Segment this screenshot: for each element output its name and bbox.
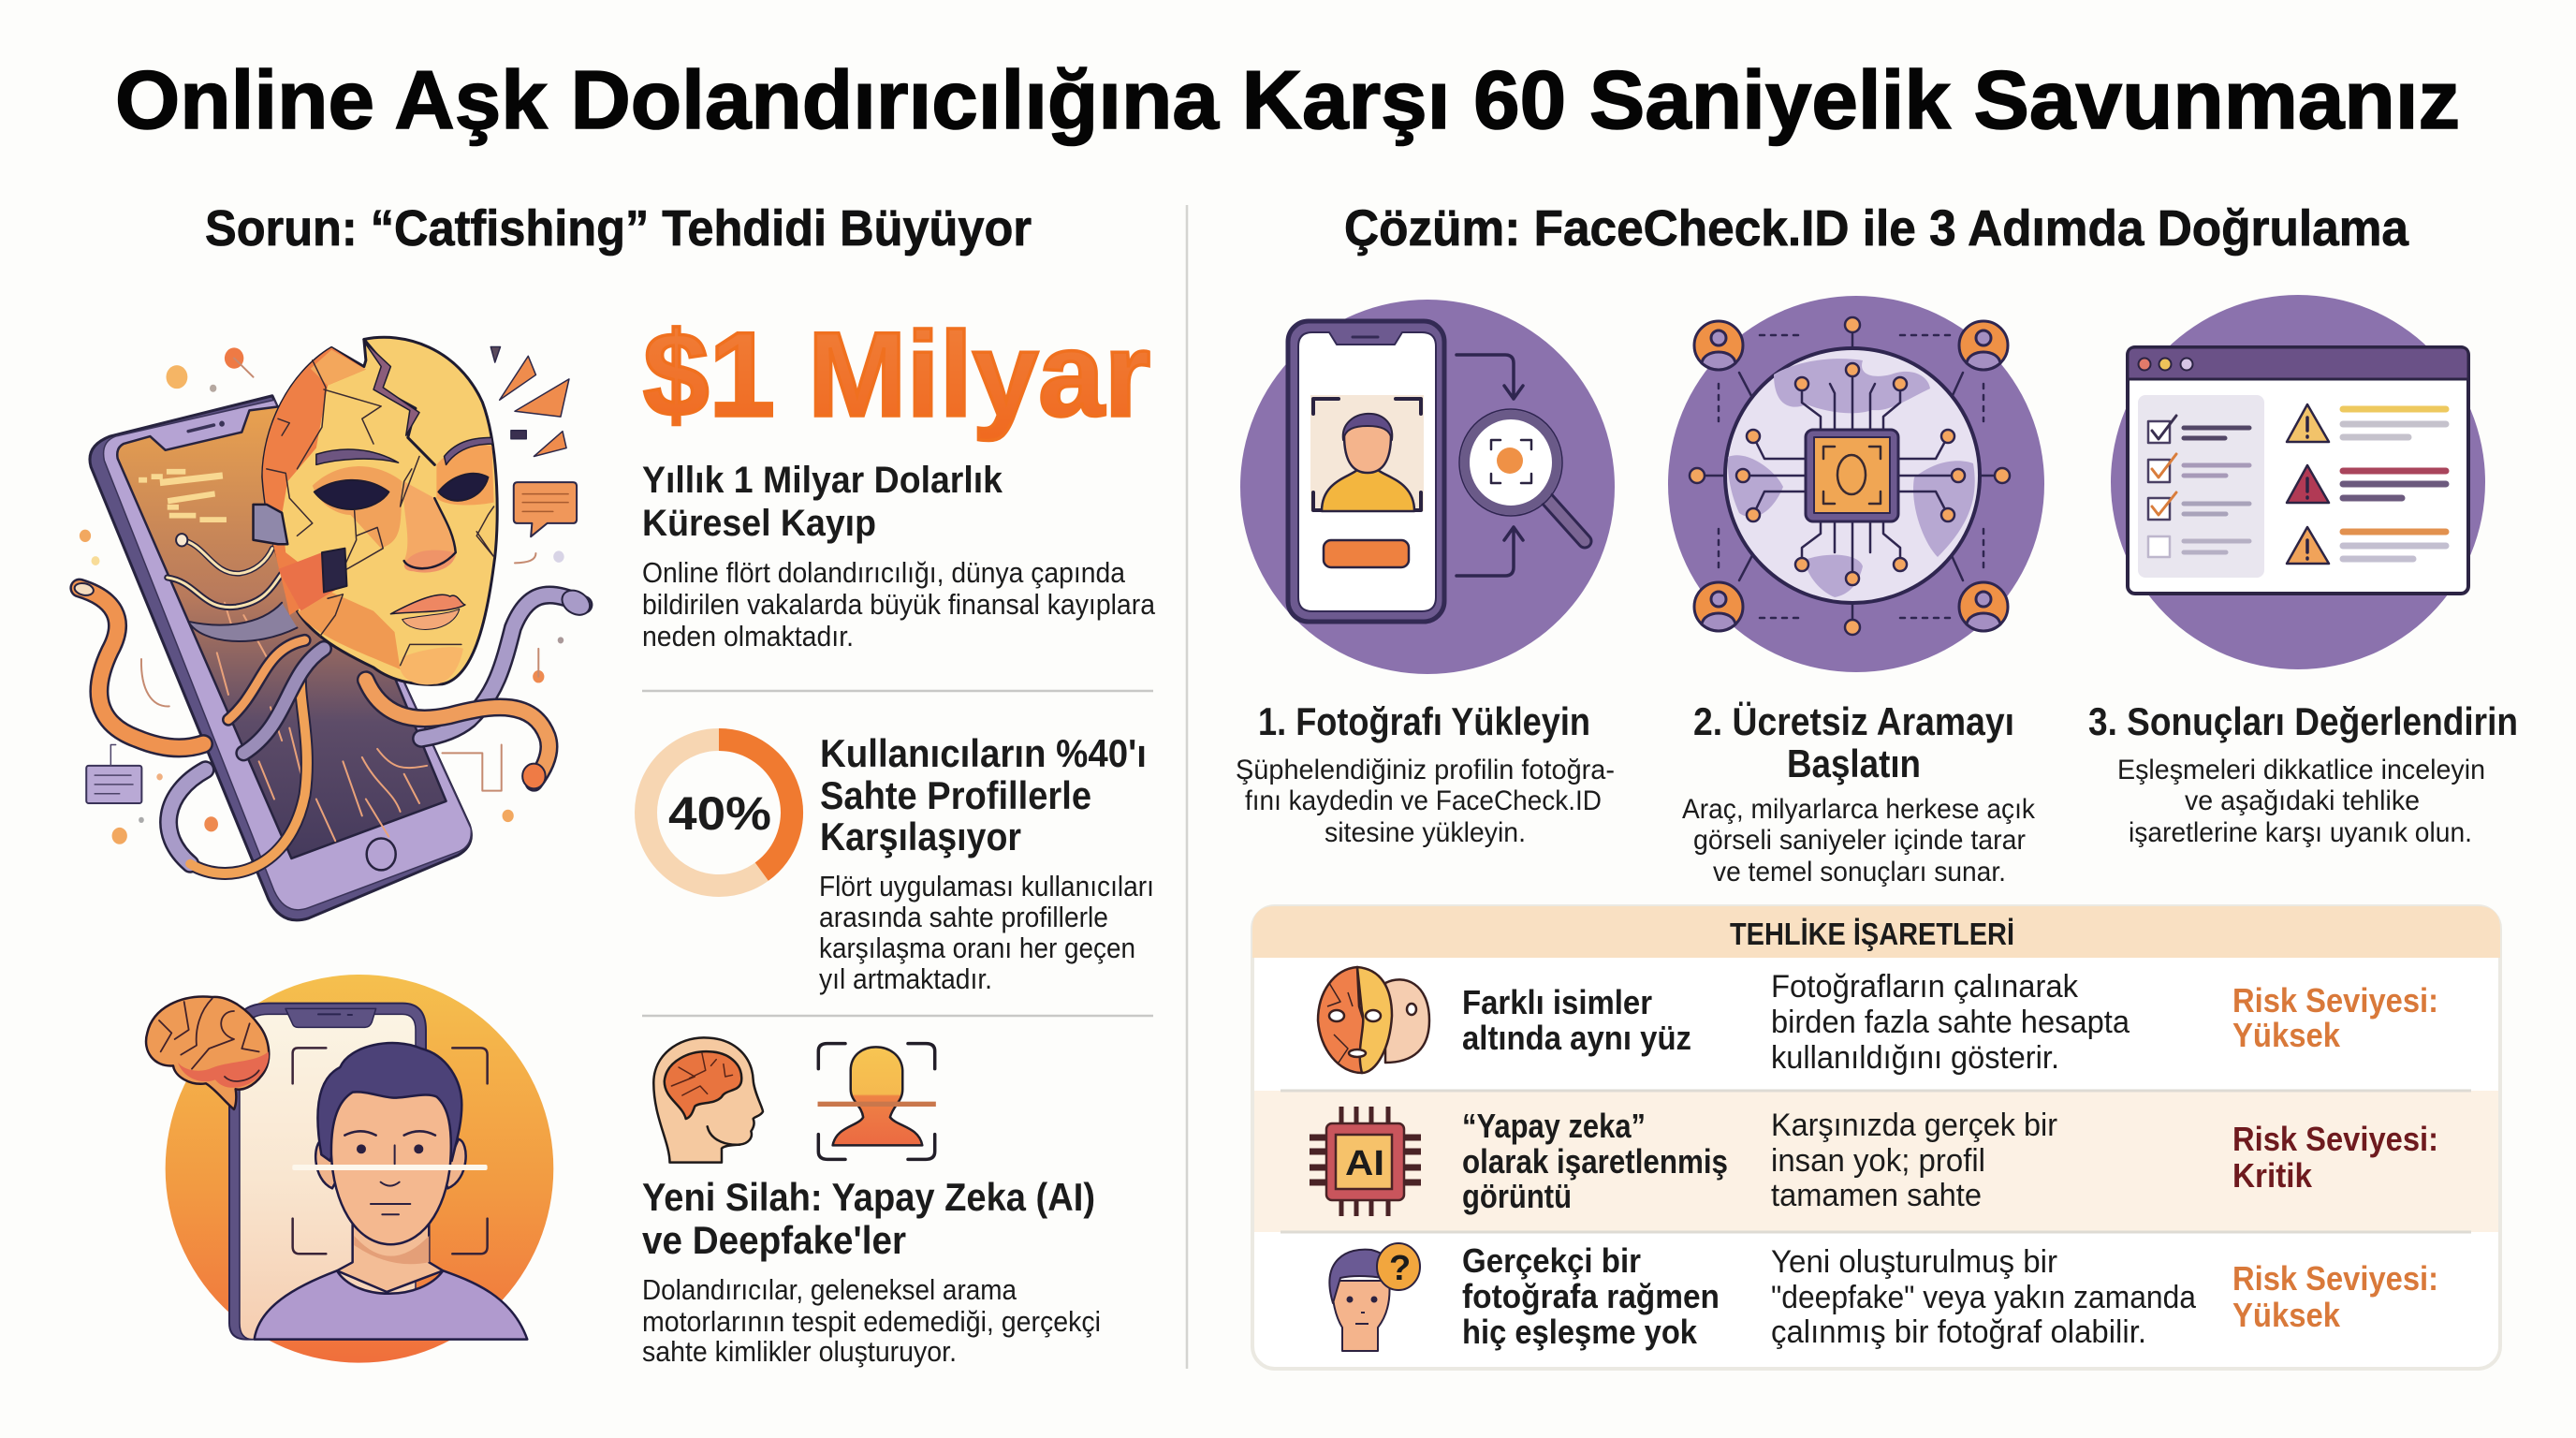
icon label: AI (1345, 1144, 1384, 1183)
risk level: high: Yüksek (2232, 1016, 2341, 1054)
title: Online Aşk Dolandırıcılığına Karşı 60 Saniyelik Savunmanız (115, 53, 2460, 146)
stat heading: Sahte Profillerle (820, 773, 1091, 817)
sign: hiç eşleşme yok (1462, 1313, 1698, 1351)
step 3: evaluate results (2088, 295, 2518, 848)
step body: ve aşağıdaki tehlike (2185, 785, 2420, 816)
sign: altında aynı yüz (1462, 1019, 1691, 1057)
step body: sitesine yükleyin. (1325, 817, 1526, 848)
stat body: bildirilen vakalarda büyük finansal kayıplara (642, 588, 1156, 621)
stat body (642, 1273, 1101, 1368)
donut value: 40% (668, 787, 771, 840)
icon glyph: ? (1389, 1249, 1411, 1288)
step body (1236, 755, 1615, 848)
step body: Eşleşmeleri dikkatlice inceleyin (2117, 755, 2485, 785)
step body: Şüphelendiğiniz profilin fotoğra- (1236, 755, 1615, 785)
row 3: no match despite realistic photo (1329, 1241, 2438, 1351)
mask (263, 337, 497, 684)
stat body (642, 556, 1156, 653)
icon: face scan silhouette (818, 1044, 936, 1159)
stat: 1 billion dollars (642, 308, 1156, 653)
meaning (1771, 969, 2130, 1076)
stat body: arasında sahte profillerle (819, 901, 1108, 933)
meaning (1771, 1244, 2196, 1350)
stat heading (642, 460, 1003, 544)
risk level: high: Risk Seviyesi: (2232, 981, 2438, 1020)
table header (1252, 906, 2500, 958)
step title: 2. Ücretsiz Aramayı (1693, 699, 2014, 743)
meaning: insan yok; profil (1771, 1143, 1985, 1179)
table header: TEHLİKE İŞARETLERİ (1730, 917, 2014, 951)
icon: phone with magnifier (1240, 300, 1615, 674)
panel: danger signs table (1252, 906, 2500, 1369)
icon: two masks (1318, 967, 1429, 1073)
row 1: same face under different names (1318, 967, 2438, 1076)
stat body: motorlarının tespit edemediği, gerçekçi (642, 1305, 1101, 1338)
stat heading: ve Deepfake'ler (642, 1218, 906, 1262)
step body (1682, 794, 2036, 888)
step body: görseli saniyeler içinde tarar (1693, 825, 2026, 856)
stat body: neden olmaktadır. (642, 620, 854, 653)
sign: görüntü (1462, 1177, 1572, 1215)
stat body: sahte kimlikler oluşturuyor. (642, 1335, 957, 1368)
stat heading: Karşılaşıyor (820, 814, 1021, 858)
stat heading (820, 731, 1147, 858)
stat body: yıl artmaktadır. (819, 962, 992, 995)
risk level: high (2232, 1259, 2438, 1334)
meaning: çalınmış bir fotoğraf olabilir. (1771, 1314, 2146, 1350)
step body: ve temel sonuçları sunar. (1713, 857, 2006, 888)
meaning (1771, 1108, 2057, 1213)
step title (1693, 699, 2014, 785)
step 1: upload photo (1236, 300, 1615, 848)
step body: işaretlerine karşı uyanık olun. (2129, 817, 2472, 848)
risk level: critical: Risk Seviyesi: (2232, 1120, 2438, 1158)
meaning: Fotoğrafların çalınarak (1771, 969, 2079, 1005)
meaning: kullanıldığını gösterir. (1771, 1040, 2059, 1076)
stat body (819, 870, 1154, 995)
step title: 3. Sonuçları Değerlendirin (2088, 699, 2518, 743)
risk level: high (2232, 981, 2438, 1054)
phone body (90, 396, 471, 920)
risk level: high: Risk Seviyesi: (2232, 1259, 2438, 1298)
icon: AI chip (1310, 1107, 1421, 1216)
sign: “Yapay zeka” (1462, 1107, 1646, 1145)
icon: head with brain (653, 1037, 763, 1163)
stat body: Flört uygulaması kullanıcıları (819, 870, 1154, 902)
stat body: karşılaşma oranı her geçen (819, 932, 1135, 964)
sign (1462, 1107, 1728, 1215)
stat: 40 percent (646, 731, 1154, 995)
meaning: birden fazla sahte hesapta (1771, 1005, 2130, 1040)
step 2: start free search (1668, 296, 2044, 888)
sign: Gerçekçi bir (1462, 1241, 1641, 1280)
meaning: Karşınızda gerçek bir (1771, 1108, 2057, 1143)
step body (2117, 755, 2485, 848)
risk level: high: Yüksek (2232, 1296, 2341, 1334)
step title: 1. Fotoğrafı Yükleyin (1258, 699, 1590, 743)
meaning: tamamen sahte (1771, 1178, 1982, 1213)
meaning: "deepfake" veya yakın zamanda (1771, 1280, 2196, 1315)
icon: browser with warnings (2111, 295, 2485, 669)
sign (1462, 983, 1691, 1057)
sign: Farklı isimler (1462, 983, 1652, 1021)
heading: problem: Sorun: “Catfishing” Tehdidi Büyüyor (205, 200, 1032, 257)
stat heading: Küresel Kayıp (642, 503, 876, 544)
illustration: AI face scan with brain (146, 975, 553, 1363)
sign: fotoğrafa rağmen (1462, 1277, 1720, 1315)
step body: fını kaydedin ve FaceCheck.ID (1245, 785, 1602, 816)
meaning: Yeni oluşturulmuş bir (1771, 1244, 2057, 1280)
row 2: image flagged as AI (1310, 1107, 2438, 1216)
stat heading: Yeni Silah: Yapay Zeka (AI) (642, 1175, 1095, 1219)
icon: person with question mark (1329, 1243, 1420, 1351)
stat heading: Kullanıcıların %40'ı (820, 731, 1147, 775)
heading: solution: Çözüm: FaceCheck.ID ile 3 Adımda Doğrulama (1344, 200, 2409, 257)
stat heading: Yıllık 1 Milyar Dolarlık (642, 460, 1003, 501)
sign: olarak işaretlenmiş (1462, 1142, 1728, 1181)
stat heading (642, 1175, 1095, 1262)
sign (1462, 1241, 1720, 1351)
step body: Araç, milyarlarca herkese açık (1682, 794, 2036, 825)
stat: AI weapon (642, 1037, 1101, 1368)
illustration: cracked mask emerging from phone (74, 337, 593, 920)
step title: Başlatın (1787, 741, 1921, 785)
big number: $1 Milyar (643, 308, 1150, 442)
risk level: critical (2232, 1120, 2438, 1195)
tentacles (80, 540, 583, 873)
stat body: Online flört dolandırıcılığı, dünya çapında (642, 556, 1126, 589)
donut chart (646, 740, 792, 886)
stat body: Dolandırıcılar, geleneksel arama (642, 1273, 1017, 1306)
icon: globe with AI chip (1668, 296, 2044, 672)
risk level: critical: Kritik (2232, 1156, 2313, 1195)
